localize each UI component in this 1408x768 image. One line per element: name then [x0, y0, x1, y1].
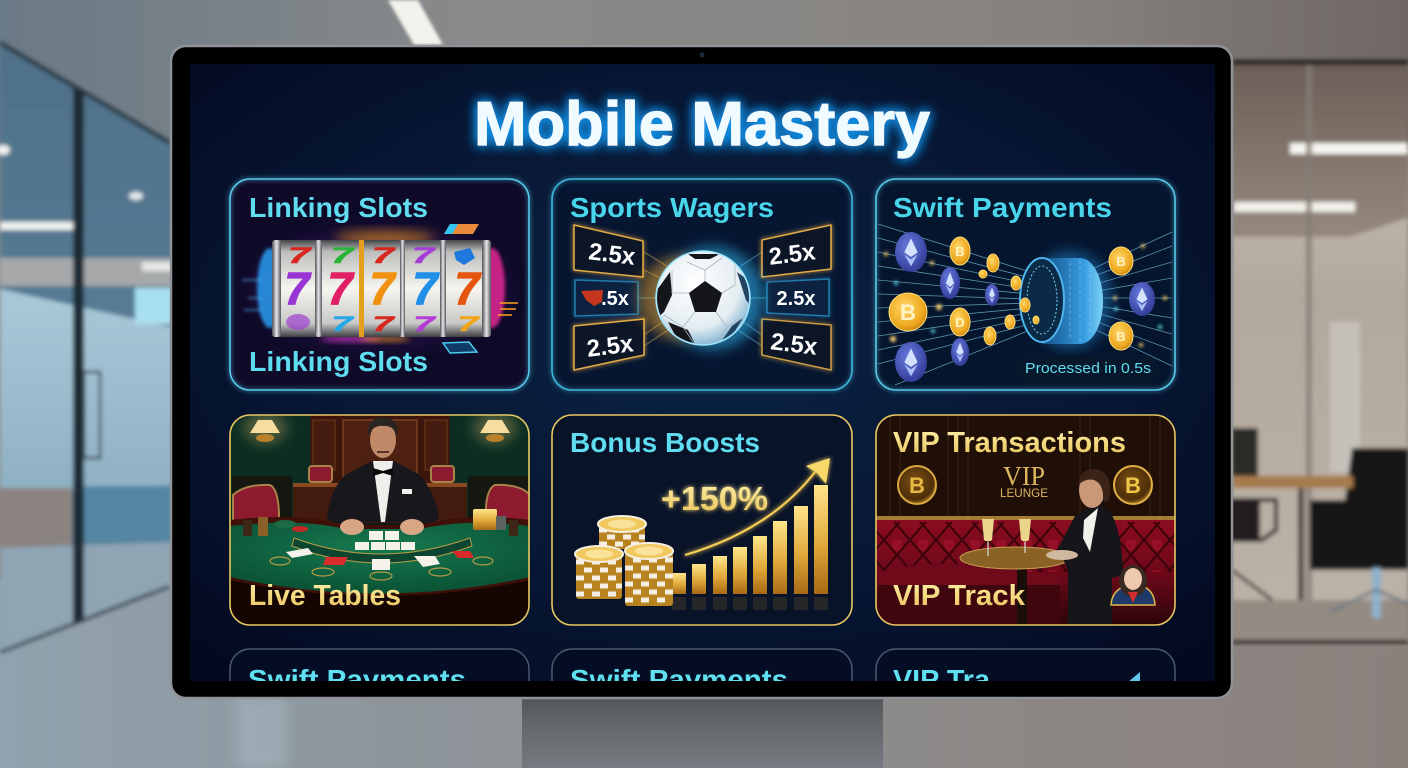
- card border: [552, 179, 852, 390]
- middle row of sevens: 7: [412, 263, 439, 314]
- ethereum coins: [895, 232, 1155, 382]
- panel: vip cut-off: VIP Tra: [893, 664, 991, 695]
- bitcoin symbols: B: [900, 300, 916, 325]
- bitcoin symbols: B: [955, 244, 965, 259]
- reel gem symbols: [454, 248, 475, 265]
- panel: swift payments centre: [552, 649, 852, 768]
- data stream lines: [878, 224, 1172, 385]
- middle row of sevens: [287, 272, 482, 305]
- panel: swift payments centre: Swift Payments: [570, 664, 788, 695]
- wall lamps: [243, 412, 517, 444]
- casino room: [230, 415, 530, 525]
- bottom row of sevens: 7: [413, 313, 437, 336]
- dealer: [327, 417, 439, 530]
- connector rays: [638, 252, 767, 346]
- bitcoin coins: [889, 237, 1133, 350]
- icon: tiger badge: [581, 290, 603, 306]
- top row of sevens: 7: [288, 243, 313, 268]
- heading: bonus boosts: Bonus Boosts: [570, 427, 760, 458]
- bitcoin symbols: [900, 244, 1126, 344]
- caption: linking slots: Linking Slots: [249, 346, 428, 377]
- card border: [552, 415, 852, 625]
- glowing sparks: [884, 244, 1167, 347]
- lounge table: [960, 547, 1070, 569]
- lounge sign: VIP: [1003, 461, 1045, 491]
- top row of sevens: 7: [412, 243, 437, 268]
- chip stacks: [575, 516, 673, 606]
- lounge wall: [890, 416, 1160, 516]
- panel: bonus boosts: [552, 415, 852, 625]
- heading: vip transactions: VIP Transactions: [893, 427, 1126, 459]
- panel: linking slots: [230, 179, 529, 390]
- speed badge: Processed in 0.5s: [1025, 360, 1151, 377]
- odds values: 2.5x: [767, 238, 818, 271]
- middle row of sevens: 7: [369, 263, 396, 314]
- card border: [876, 179, 1175, 390]
- host: [1046, 469, 1123, 625]
- odds values: 2.5x: [769, 328, 819, 361]
- odds values: [585, 238, 819, 363]
- dealer hands: [340, 519, 424, 535]
- odds values: .5x: [601, 288, 629, 310]
- bottom row of sevens: 7: [372, 313, 396, 336]
- top row of sevens: 7: [331, 243, 356, 268]
- left stack: [575, 546, 623, 599]
- floor: [0, 580, 1408, 768]
- lounge sign: LEUNGE: [1000, 486, 1048, 500]
- slot machine: [242, 232, 518, 344]
- heading: linking slots: Linking Slots: [249, 192, 428, 223]
- champagne glasses: [982, 519, 1031, 556]
- monitor frame: [171, 46, 1232, 698]
- playing cards: [286, 531, 474, 570]
- panel: swift payments: [876, 179, 1175, 390]
- panel: live tables: [230, 412, 530, 625]
- odds tiles: [574, 225, 831, 370]
- middle row of sevens: 7: [284, 263, 311, 314]
- bottom row of sevens: 7: [457, 313, 481, 336]
- flying tiles: [444, 224, 479, 234]
- back stack: [598, 516, 646, 549]
- card border: [230, 179, 529, 390]
- lounge sign: [1000, 467, 1048, 497]
- blackjack table: [230, 517, 530, 625]
- caption: vip track: VIP Track: [893, 580, 1026, 612]
- top row of sevens: [290, 247, 436, 264]
- payment drum: [1020, 250, 1112, 350]
- middle row of sevens: 7: [327, 263, 354, 314]
- odds values: 2.5x: [585, 330, 636, 363]
- front stack: [625, 543, 673, 606]
- bar chart: [672, 485, 828, 610]
- ceiling light: [388, 0, 443, 45]
- gold wall coins: [898, 466, 1152, 504]
- avatar badge: [1111, 565, 1155, 605]
- panel: vip transactions: [876, 415, 1176, 625]
- screen: [190, 64, 1215, 681]
- growth arrow: [685, 458, 830, 555]
- betting circles: [270, 557, 493, 580]
- gold wall coins: B: [909, 473, 925, 498]
- reel separators: [272, 240, 491, 337]
- speed badge: [1014, 355, 1158, 382]
- bottom row of sevens: [334, 316, 481, 332]
- card border: [876, 415, 1175, 625]
- monitor: [171, 46, 1232, 768]
- chip stacks: [243, 509, 518, 536]
- football: [638, 246, 764, 350]
- ceiling: [0, 0, 1408, 150]
- panel: swift payments left: [229, 648, 530, 681]
- bonus value: +150%: [661, 480, 768, 517]
- panel: vip cut-off: [876, 649, 1175, 768]
- top row of sevens: 7: [372, 243, 397, 268]
- right office room: [1232, 60, 1408, 646]
- caption: live tables: Live Tables: [249, 580, 401, 612]
- red sofa: [876, 516, 1176, 625]
- panel: sports wagers: [552, 179, 852, 390]
- webcam: [700, 52, 704, 58]
- panel: swift payments left: Swift Payments: [248, 664, 466, 695]
- bottom row of sevens: 7: [331, 313, 355, 336]
- cut-off third row: [229, 648, 1176, 681]
- bitcoin symbols: B: [1116, 254, 1126, 269]
- middle row of sevens: 7: [454, 263, 481, 314]
- bitcoin symbols: B: [1116, 329, 1126, 344]
- bitcoin symbols: D: [955, 315, 965, 330]
- left glass wall: [0, 43, 175, 652]
- odds values: 2.5x: [777, 288, 815, 310]
- odds values: 2.5x: [587, 238, 637, 271]
- title: Mobile Mastery: [474, 90, 931, 159]
- gold wall coins: B: [1125, 473, 1141, 498]
- monitor stand: [522, 696, 883, 768]
- heading: swift payments: Swift Payments: [893, 192, 1112, 223]
- card border: [230, 415, 529, 625]
- heading: sports wagers: Sports Wagers: [570, 192, 774, 223]
- chairs: [232, 465, 528, 520]
